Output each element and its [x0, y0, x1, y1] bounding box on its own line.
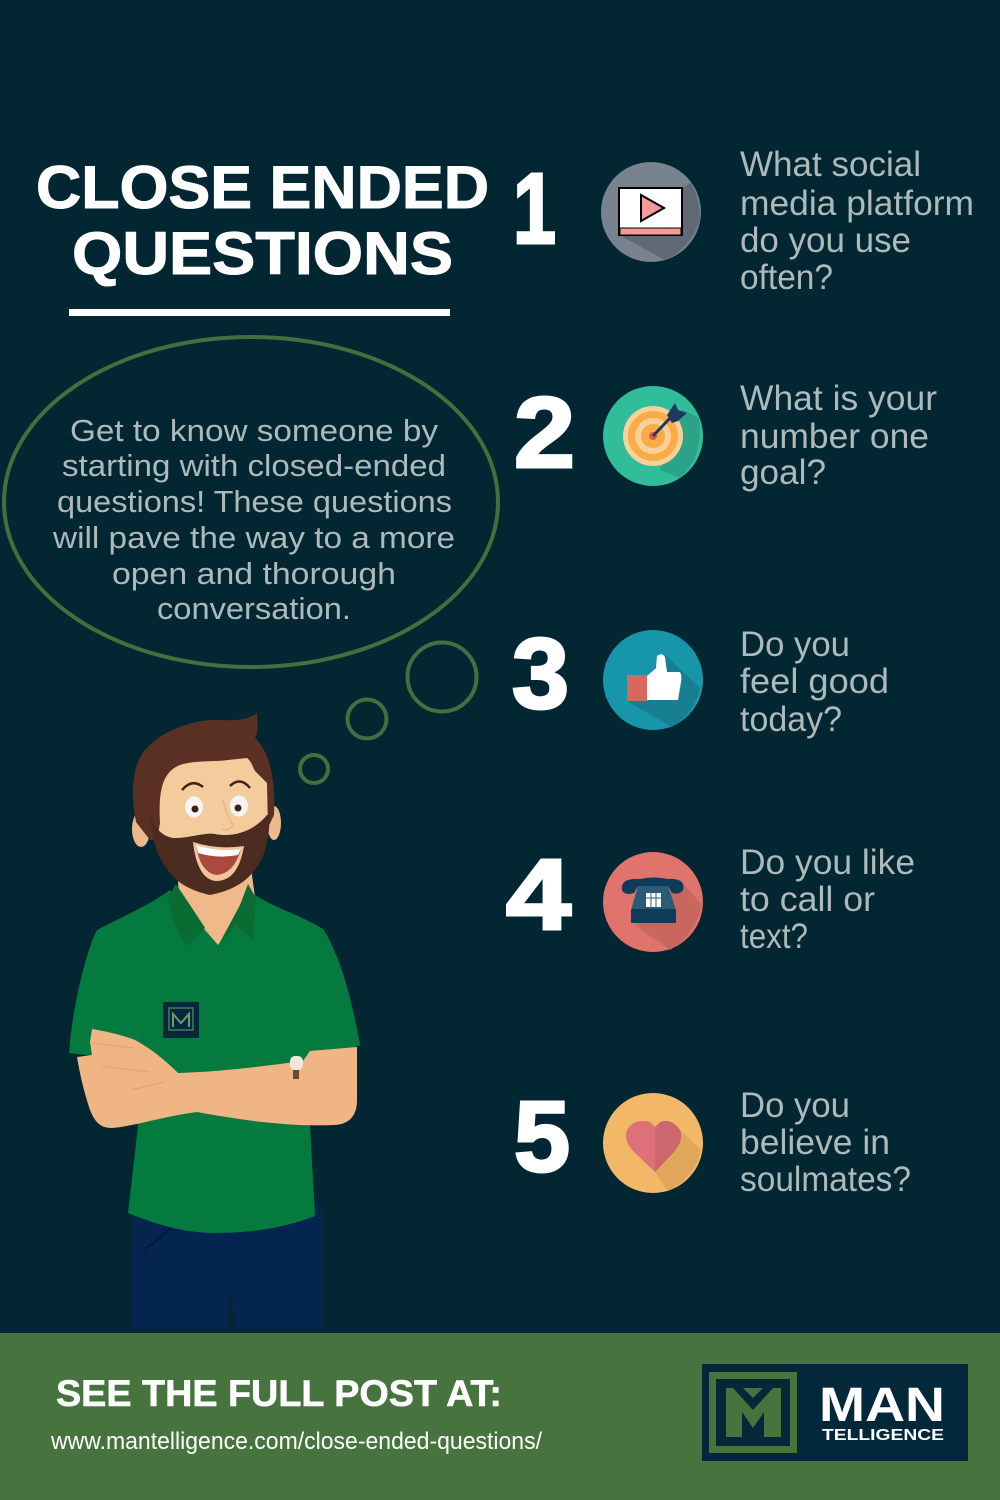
- question text: soulmates?: [740, 1160, 911, 1199]
- eyebrows: [182, 781, 250, 790]
- title underline: [69, 309, 450, 316]
- footer band: [0, 1333, 1000, 1500]
- question text: Do you: [740, 1086, 850, 1125]
- question text: What social: [740, 145, 921, 184]
- question text: today?: [740, 700, 842, 739]
- title: [36, 154, 489, 287]
- question text: number one: [740, 417, 929, 456]
- question text: [740, 1086, 911, 1199]
- question text: Do you: [740, 625, 850, 664]
- item 5: [514, 1081, 911, 1199]
- question text: do you use: [740, 221, 911, 260]
- bubble text: Get to know someone by: [70, 413, 439, 448]
- shirt: [69, 890, 360, 1233]
- question text: [740, 379, 937, 492]
- question text: [740, 843, 915, 956]
- bubble text: conversation.: [157, 591, 351, 626]
- shirt collar: [168, 884, 256, 946]
- icon: telephone: [603, 852, 703, 952]
- face: [158, 758, 268, 880]
- fingers: [92, 1043, 165, 1090]
- hair: [133, 713, 274, 840]
- icon: heart: [603, 1093, 703, 1193]
- icon: video player: [601, 162, 701, 262]
- icon: thumbs up: [603, 630, 703, 730]
- title: CLOSE ENDED: [36, 154, 489, 221]
- number 1: 1: [513, 153, 556, 265]
- eyes: [185, 796, 248, 818]
- ears: [132, 806, 281, 847]
- crossed arms: [77, 1029, 357, 1128]
- question text: [740, 145, 974, 297]
- character: smiling bearded man: [69, 713, 360, 1328]
- title: QUESTIONS: [72, 220, 453, 287]
- number 3: 3: [512, 618, 569, 730]
- shirt logo badge: [163, 1002, 199, 1038]
- item 2: [514, 377, 937, 492]
- bubble text: open and thorough: [112, 556, 396, 591]
- question text: believe in: [740, 1123, 890, 1162]
- number 2: 2: [514, 377, 575, 489]
- icon: target with dart: [603, 386, 703, 486]
- question text: goal?: [740, 453, 826, 492]
- bubble text: will pave the way to a more: [52, 520, 455, 555]
- item 3: [512, 618, 889, 739]
- logo: MAN: [819, 1379, 945, 1432]
- bubble text: questions! These questions: [57, 484, 452, 519]
- bubble text: [52, 413, 455, 626]
- neck: [176, 860, 256, 948]
- question text: feel good: [740, 662, 889, 701]
- footer heading: SEE THE FULL POST AT:: [56, 1373, 502, 1414]
- question text: text?: [740, 917, 808, 956]
- nose: [222, 800, 233, 830]
- beard: [150, 815, 270, 895]
- question text: [740, 625, 889, 739]
- bubble text: starting with closed-ended: [62, 448, 446, 483]
- number 4: 4: [506, 839, 571, 951]
- item 4: [506, 839, 915, 956]
- wristwatch: [290, 1056, 303, 1079]
- question text: Do you like: [740, 843, 915, 882]
- pants: [131, 1205, 322, 1328]
- mouth: [193, 842, 244, 881]
- question text: to call or: [740, 880, 875, 919]
- thought bubble: [4, 337, 498, 667]
- logo: TELLIGENCE: [822, 1427, 944, 1444]
- footer url: www.mantelligence.com/close-ended-questions/: [50, 1428, 542, 1455]
- question text: media platform: [740, 184, 974, 223]
- question text: often?: [740, 258, 833, 297]
- logo: [702, 1364, 968, 1461]
- thought bubble trail: [300, 642, 476, 783]
- item 1: [513, 145, 974, 297]
- question text: What is your: [740, 379, 937, 418]
- number 5: 5: [514, 1081, 570, 1193]
